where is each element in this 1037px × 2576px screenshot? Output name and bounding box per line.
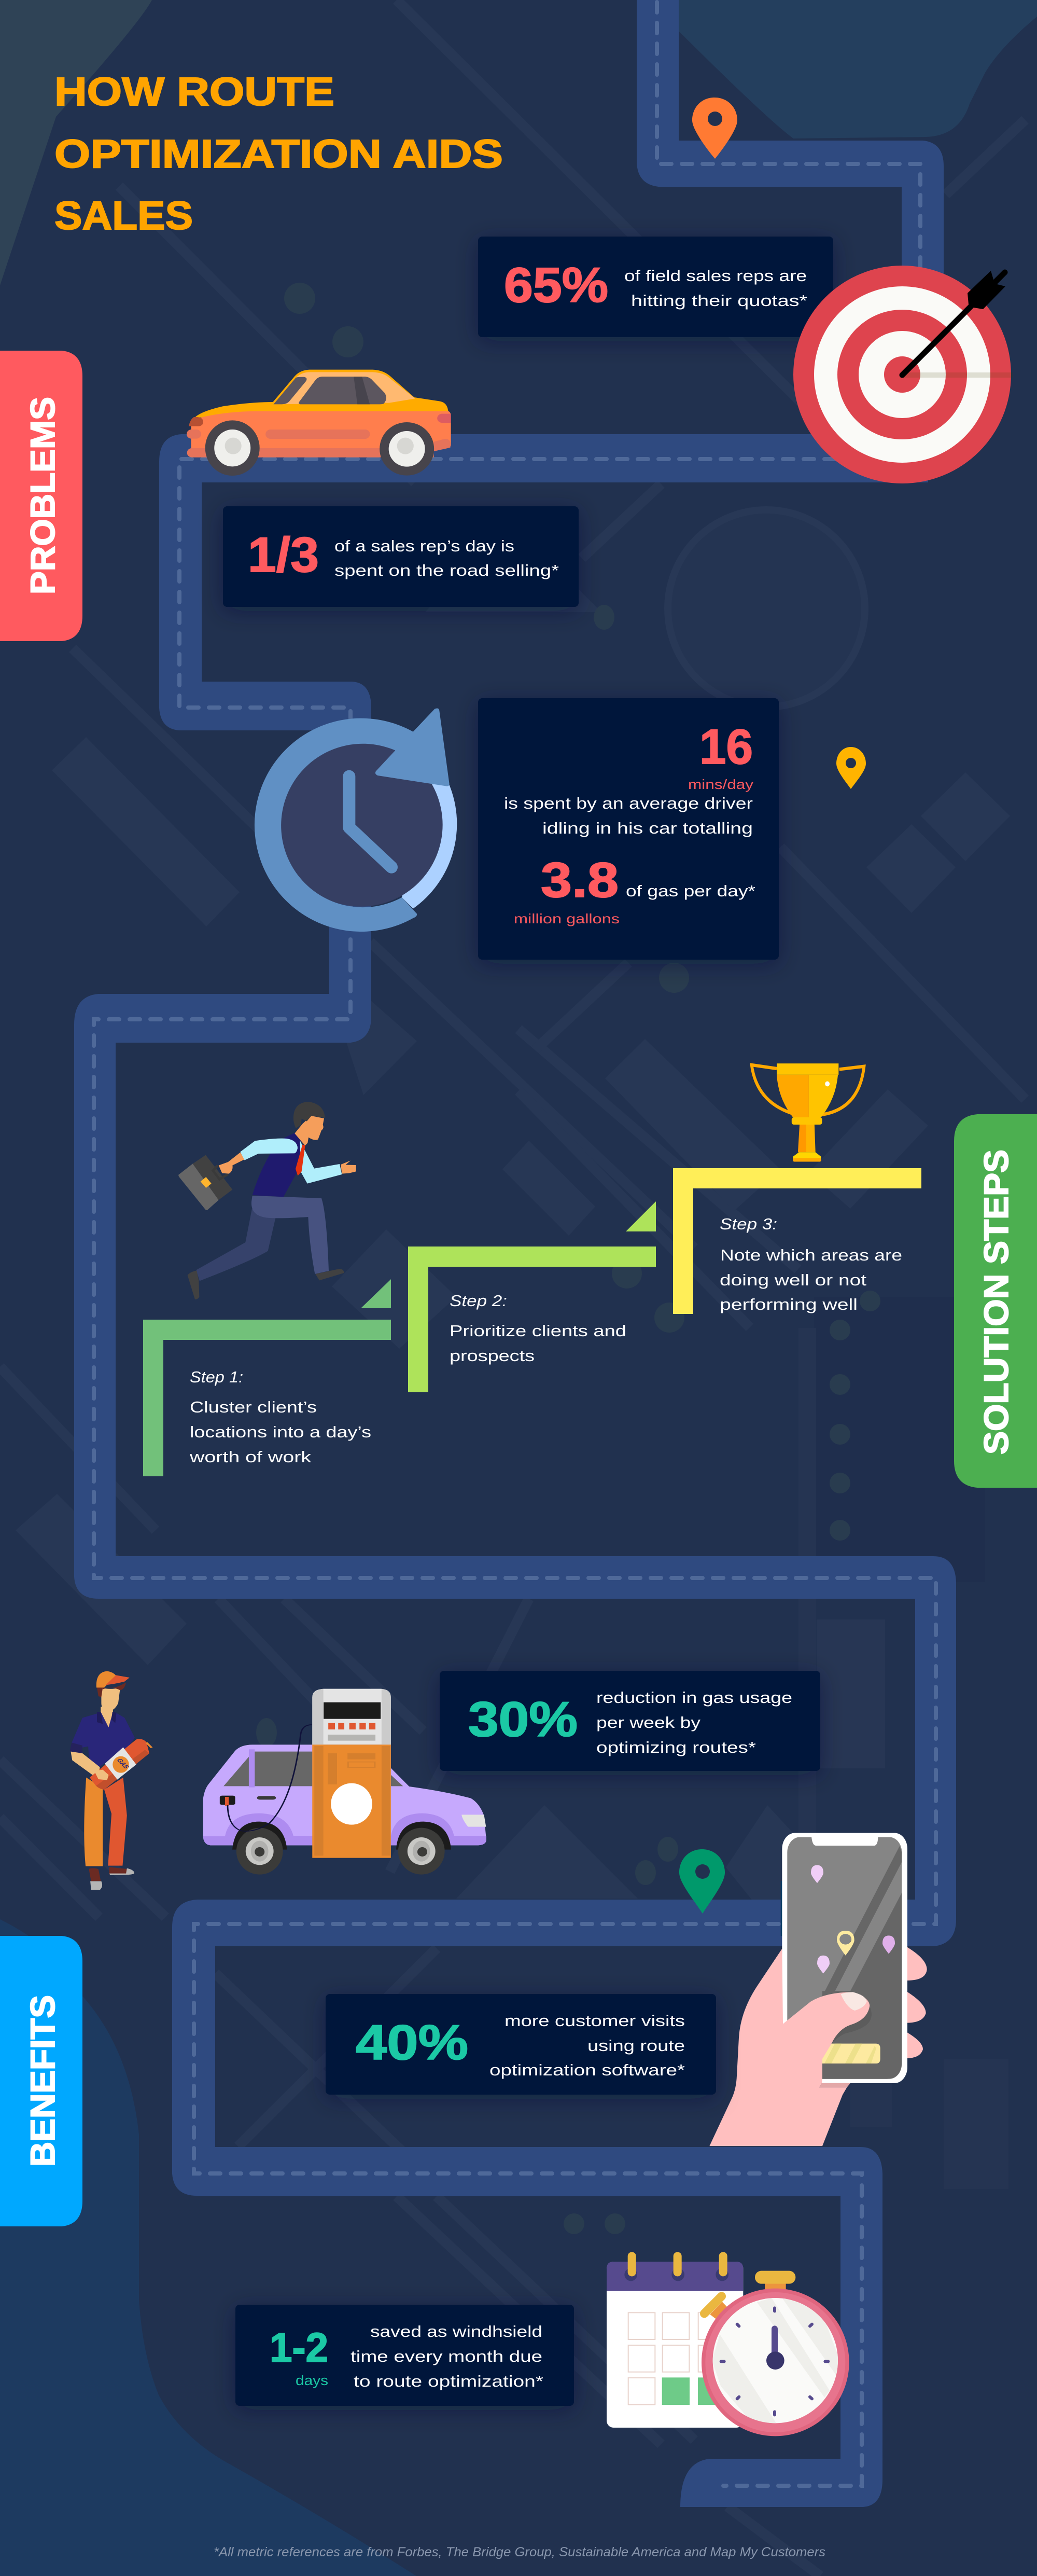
title <box>54 70 503 238</box>
illustration: man with gas can <box>70 1671 151 1890</box>
stat panel: one third: spent on the road selling* <box>334 561 559 579</box>
stat panel: one third: of a sales rep’s day is <box>334 537 514 555</box>
stat panel: 40 percent: more customer visits <box>505 2012 685 2030</box>
stat panel: 40 percent: using route <box>587 2037 685 2055</box>
icon: orange car <box>187 370 451 476</box>
stat panel: 30 percent: 30% <box>468 1692 578 1747</box>
title: HOW ROUTE <box>54 70 334 114</box>
stat panel: 65 percent: 65% <box>504 258 608 313</box>
stat panel: 1-2 days: time every month due <box>351 2347 542 2365</box>
step 3: yellow step with text <box>673 1168 921 1314</box>
icon: yellow map pin <box>836 747 866 789</box>
step 3: yellow step with text: performing well <box>720 1295 858 1313</box>
step 3: yellow step with text: Step 3: <box>720 1215 777 1233</box>
icon: running salesman with briefcase <box>178 1102 356 1299</box>
stat panel: 30 percent: reduction in gas usage <box>596 1688 792 1707</box>
footnote: *All metric references are from Forbes, The Bridge Group, Sustainable America and Map My Customers <box>214 2545 825 2559</box>
step 2: lime step with text: prospects <box>450 1347 535 1365</box>
section tab: benefits: BENEFITS <box>23 1995 62 2167</box>
icon: orange map pin <box>692 98 737 159</box>
stat panel: idling minutes and gas: is spent by an average driver <box>504 794 753 812</box>
step 3: yellow step with text: doing well or not <box>720 1271 866 1289</box>
title: OPTIMIZATION AIDS <box>54 132 503 176</box>
section tab: solution steps: SOLUTION STEPS <box>977 1149 1015 1455</box>
step 1: green step with text: worth of work <box>189 1448 312 1466</box>
stat panel: 30 percent <box>440 1671 820 1771</box>
step 2: lime step with text: Prioritize clients and <box>450 1322 626 1340</box>
section tab: solution steps <box>954 1114 1037 1488</box>
stat panel: idling minutes and gas: million gallons <box>514 911 620 926</box>
stat panel: 1-2 days: days <box>296 2373 328 2388</box>
icon: green map pin <box>679 1849 725 1914</box>
stat panel: 1-2 days: saved as windhsield <box>370 2322 542 2340</box>
step 2: lime step with text: Step 2: <box>450 1292 507 1310</box>
illustration: hand holding phone with map <box>709 1833 927 2146</box>
stat panel: 65 percent: hitting their quotas* <box>631 292 807 310</box>
stat panel: 40 percent: 40% <box>356 2015 468 2070</box>
illustration: purple car at gas pump <box>203 1689 486 1875</box>
stat panel: 1-2 days <box>235 2305 574 2406</box>
stat panel: 30 percent: optimizing routes* <box>596 1738 756 1756</box>
icon: trophy <box>752 1063 864 1162</box>
stat panel: 40 percent: optimization software* <box>489 2061 685 2079</box>
stat panel: 30 percent: per week by <box>596 1713 701 1732</box>
step 1: green step with text: Step 1: <box>190 1368 243 1386</box>
stat panel: 65 percent: of field sales reps are <box>624 267 807 285</box>
icon: target with arrow <box>793 266 1013 483</box>
section tab: benefits <box>0 1936 82 2226</box>
step 1: green step with text: Cluster client’s <box>190 1398 317 1416</box>
step 3: yellow step with text: Note which areas are <box>720 1246 902 1264</box>
step 1: green step with text <box>143 1279 391 1476</box>
stat panel: 1-2 days: 1-2 <box>270 2324 328 2371</box>
stat panel: idling minutes and gas: idling in his car totalling <box>542 819 753 837</box>
title: SALES <box>54 193 193 238</box>
illustration: man with gas can: GAS <box>115 1758 131 1769</box>
stat panel: 65 percent <box>478 237 833 337</box>
stat panel: idling minutes and gas <box>478 698 779 960</box>
stat panel: 40 percent <box>326 1994 716 2095</box>
section tab: problems <box>0 351 82 641</box>
stat panel: idling minutes and gas: 16 <box>699 719 753 774</box>
stat panel: one third <box>223 506 579 607</box>
step 2: lime step with text <box>408 1201 656 1392</box>
stat panel: 1-2 days: to route optimization* <box>354 2372 543 2390</box>
stat panel: idling minutes and gas: mins/day <box>688 777 753 792</box>
stat panel: one third: 1/3 <box>248 528 319 583</box>
section tab: problems: PROBLEMS <box>23 397 62 594</box>
icon: clock with circular arrow <box>255 709 457 932</box>
stat panel: idling minutes and gas: 3.8 <box>541 853 619 908</box>
icon: calendar and stopwatch <box>607 2252 849 2436</box>
stat panel: idling minutes and gas: of gas per day* <box>626 882 755 900</box>
step 1: green step with text: locations into a day’s <box>190 1423 371 1441</box>
